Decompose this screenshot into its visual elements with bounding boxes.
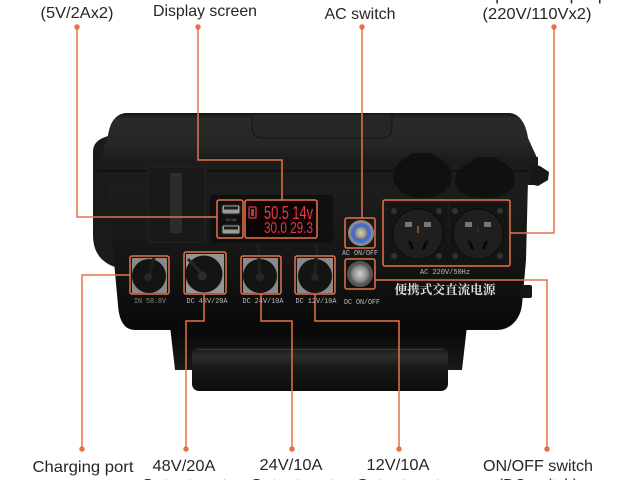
USB ports: 5V/2A (226, 218, 237, 223)
panel labels: AC ON/OFF (342, 250, 378, 258)
panel labels (134, 250, 497, 307)
highlight boxes (130, 200, 510, 294)
case: left side bulge (93, 135, 118, 268)
label: AC output: (220V/110Vx2) (482, 6, 592, 23)
label: display screen: Display screen (153, 3, 257, 20)
case: right lower latch (520, 285, 532, 298)
leader: DC switch (375, 280, 549, 451)
label: 24V output (250, 457, 335, 480)
panel labels: DC ON/OFF (344, 299, 380, 307)
case: lower body under handle (170, 326, 467, 370)
label: 12V output: 12V/10A (366, 457, 430, 474)
power station case (93, 113, 549, 391)
connector: 24V (243, 244, 278, 293)
panel labels: DC 12V/10A (296, 298, 337, 306)
socket left (388, 203, 447, 262)
leader: 48V (184, 294, 204, 451)
panel labels: IN 58.8V (134, 298, 167, 306)
display readings: 50.5 14v (264, 203, 313, 223)
connector: 12V (297, 244, 333, 293)
case: right latch (530, 164, 549, 186)
panel labels: DC 48V/20A (186, 298, 228, 306)
label: 48V output: 48V/20A (152, 458, 216, 475)
socket cover left (393, 153, 452, 198)
panel labels: DC 24V/10A (242, 298, 284, 306)
label: 12V output (356, 457, 441, 480)
case: seam band (98, 157, 538, 185)
case: latch block (148, 167, 205, 242)
leader: charging port (80, 275, 130, 451)
AC switch button (348, 220, 374, 246)
DC switch button (347, 261, 373, 287)
label: 48V output (141, 458, 228, 480)
leader: AC switch (360, 25, 364, 218)
leader: AC output (510, 25, 556, 233)
panel labels: 便携式交直流电源 (394, 282, 497, 297)
handle (192, 347, 448, 391)
case: display panel plate (210, 195, 333, 243)
connector: charging (132, 258, 167, 293)
label: ON/OFF switch: ON/OFF switch (483, 458, 593, 475)
display readings: 30.0 29.3 (264, 220, 313, 237)
leader: display (196, 25, 282, 200)
leader: 24V (261, 294, 294, 451)
case: lid recess (252, 114, 392, 138)
socket right (450, 203, 507, 262)
leader: 12V (315, 294, 401, 451)
panel labels: AC 220V/50Hz (420, 269, 470, 277)
socket cover right (455, 157, 515, 198)
label: 24V output: 24V/10A (260, 457, 323, 474)
display readings (264, 203, 313, 237)
label: AC output (467, 0, 628, 23)
label: AC switch: AC switch (324, 6, 396, 23)
LCD display (246, 201, 316, 237)
AC sockets (388, 153, 515, 262)
icon: battery (249, 207, 256, 218)
case: main body (108, 180, 528, 330)
label: USB: (5V/2Ax2) (40, 5, 114, 22)
DC connectors (132, 244, 333, 293)
leader: USB (75, 25, 217, 217)
connector: 48V (186, 254, 224, 293)
label: charging port: Charging port (32, 459, 134, 476)
case: lid (100, 113, 538, 160)
USB ports (222, 205, 240, 234)
